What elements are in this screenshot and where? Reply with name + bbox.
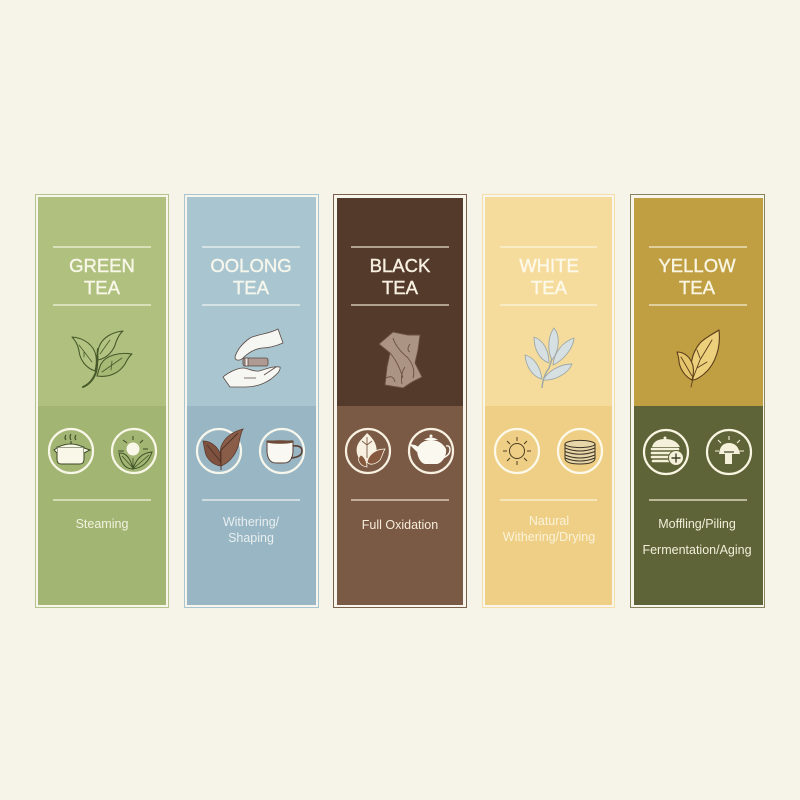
- heading: yellow tea: YELLOW: [658, 255, 736, 276]
- heading: oolong tea: OOLONG: [210, 255, 292, 276]
- icon: green tea leaves: [72, 331, 132, 387]
- panel: white tea: [482, 194, 614, 608]
- process label: steaming: Steaming: [76, 517, 128, 531]
- process label: withering and shaping: Shaping: [228, 531, 274, 545]
- icon: mushroom with rays: [707, 430, 751, 474]
- icon: sun: [495, 429, 539, 473]
- process label: moffling and piling, fermentation and aging: Fermentation/Aging: [642, 543, 752, 557]
- heading: black tea: TEA: [382, 277, 419, 298]
- heading: oolong tea: TEA: [233, 277, 270, 298]
- panel: oolong tea: [184, 194, 318, 608]
- icon: yellow leaves: [677, 330, 719, 387]
- heading: yellow tea: TEA: [679, 277, 716, 298]
- icon: brown leaves: [197, 429, 243, 473]
- icon: teapot: [409, 429, 453, 473]
- process label: natural withering and drying: Natural: [529, 514, 569, 528]
- process label: moffling and piling, fermentation and aging: Moffling/Piling: [658, 517, 736, 531]
- icon: steaming pot: [49, 429, 93, 473]
- icon: stacked tea cakes: [558, 429, 602, 473]
- panel: black tea: [334, 194, 466, 608]
- heading: green tea: TEA: [84, 277, 121, 298]
- process label: full oxidation: Full Oxidation: [362, 518, 438, 532]
- icon: sun over leaves: [112, 429, 156, 473]
- heading: white tea: WHITE: [519, 255, 579, 276]
- icon: oxidized leaf: [379, 332, 422, 388]
- heading: black tea: BLACK: [370, 255, 431, 276]
- icon: silver leaf branch: [525, 328, 574, 388]
- panel: green tea: [36, 194, 168, 608]
- icon: hands rolling tea: [223, 329, 283, 387]
- icon: leaf in circle: [346, 429, 390, 473]
- process label: withering and shaping: Withering/: [223, 515, 280, 529]
- icon: piling stack with plus: [644, 430, 688, 474]
- heading: white tea: TEA: [531, 277, 568, 298]
- process label: natural withering and drying: Withering/Drying: [503, 530, 595, 544]
- heading: green tea: GREEN: [69, 255, 135, 276]
- panel: yellow tea: [630, 194, 764, 608]
- icon: tea cup: [260, 429, 304, 473]
